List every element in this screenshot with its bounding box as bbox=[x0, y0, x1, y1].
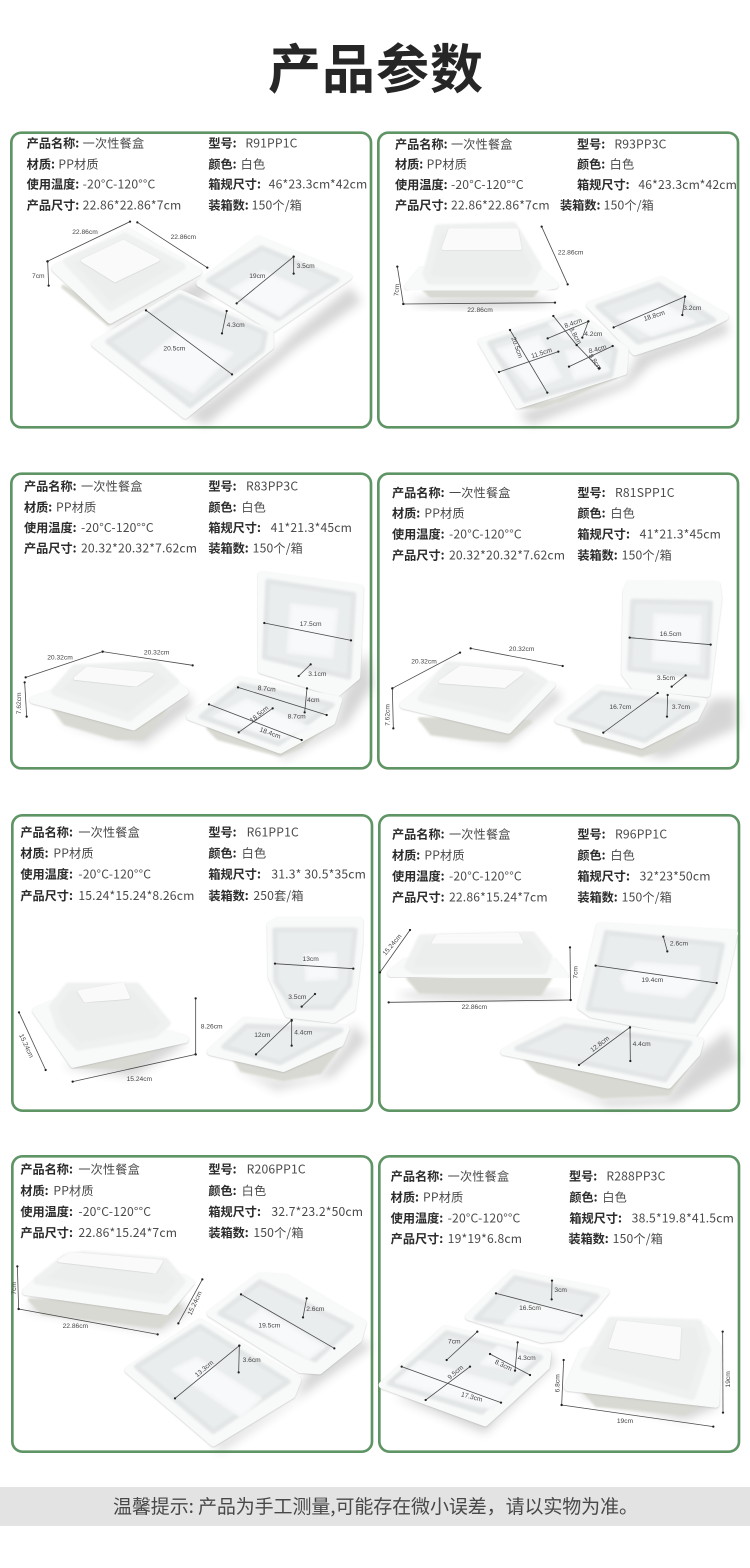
dimensions: 3.5cm bbox=[288, 994, 307, 1001]
spec text: PP材质 bbox=[424, 504, 465, 522]
dimensions: 8.4cm bbox=[588, 344, 608, 355]
dimensions: 20.32cm bbox=[411, 658, 437, 665]
spec text: -20°C-120°°C bbox=[78, 1202, 151, 1220]
spec text: 装箱数: bbox=[208, 195, 249, 213]
notice band bbox=[0, 1487, 750, 1526]
dimensions: 4.3cm bbox=[518, 1355, 536, 1362]
spec text: 白色 bbox=[610, 504, 635, 522]
dimensions: 9.5cm bbox=[447, 1364, 465, 1381]
spec text: 装箱数: bbox=[568, 1229, 609, 1247]
spec text: 一次性餐盒 bbox=[78, 1160, 140, 1178]
dimensions: 19cm bbox=[617, 1418, 634, 1425]
spec text: R81SPP1C bbox=[615, 483, 675, 501]
spec text: 产品尺寸: bbox=[27, 195, 79, 213]
spec text: 型号: bbox=[208, 1160, 237, 1178]
spec text: 箱规尺寸: bbox=[577, 524, 630, 542]
dimensions: 13.3cm bbox=[194, 1359, 215, 1379]
dimensions: 22.86cm bbox=[171, 234, 197, 241]
spec text: 一次性餐盒 bbox=[449, 483, 511, 501]
dimensions: 3.2cm bbox=[683, 305, 702, 312]
product: open box bbox=[558, 584, 737, 758]
spec text: 白色 bbox=[610, 846, 635, 864]
dimensions: 7.62cm bbox=[384, 704, 391, 726]
dimensions: 20.32cm bbox=[509, 646, 535, 653]
spec text: 使用温度: bbox=[20, 865, 73, 883]
dimensions: 19.4cm bbox=[641, 977, 664, 984]
spec text: 22.86*22.86*7cm bbox=[451, 196, 550, 214]
spec text: 产品尺寸: bbox=[24, 539, 77, 557]
product: closed box bbox=[408, 226, 555, 308]
dimensions: 3.1cm bbox=[308, 671, 327, 678]
dimensions: 8.8cm bbox=[567, 327, 583, 346]
spec text: 材质: bbox=[391, 1187, 419, 1205]
spec text: 箱规尺寸: bbox=[577, 867, 630, 885]
dimensions: 12.8cm bbox=[589, 1035, 611, 1054]
spec text: 装箱数: bbox=[208, 1223, 249, 1241]
panel: R288PP3C bbox=[379, 1156, 739, 1452]
spec text: 41*21.3*45cm bbox=[271, 518, 352, 536]
spec text: 产品名称: bbox=[392, 825, 445, 843]
dimensions: 15.24cm bbox=[187, 1290, 204, 1316]
dimensions: 18.8cm bbox=[643, 309, 666, 323]
spec text: 32*23*50cm bbox=[640, 867, 711, 885]
dimensions: 22.86cm bbox=[63, 1323, 89, 1330]
dimensions: 16.5cm bbox=[660, 631, 682, 638]
panel border bbox=[378, 133, 738, 427]
spec text: 颜色: bbox=[577, 846, 606, 864]
spec text: 150个/箱 bbox=[622, 887, 672, 905]
spec text: 白色 bbox=[241, 497, 266, 515]
spec text: PP材质 bbox=[423, 1187, 463, 1205]
spec text: 产品尺寸: bbox=[392, 887, 445, 905]
spec text: 一次性餐盒 bbox=[78, 823, 140, 841]
dimensions bbox=[17, 956, 353, 1083]
spec text: 38.5*19.8*41.5cm bbox=[632, 1208, 734, 1226]
dimensions: 8.26cm bbox=[201, 1023, 223, 1030]
product: open box bbox=[482, 280, 728, 425]
dimensions: 8.3cm bbox=[494, 1359, 513, 1373]
dimensions: 4.4cm bbox=[294, 1029, 313, 1036]
spec text: 22.86*15.24*7cm bbox=[78, 1223, 177, 1241]
spec text: 型号: bbox=[577, 483, 606, 501]
spec text: 150个/箱 bbox=[253, 1223, 304, 1241]
spec text: 白色 bbox=[610, 155, 634, 173]
spec text: -20°C-120°°C bbox=[451, 175, 524, 193]
dimensions: 11.5cm bbox=[531, 347, 553, 360]
dimensions: 7cm bbox=[448, 1338, 461, 1345]
dimensions: 3.5cm bbox=[297, 263, 315, 270]
spec text: 颜色: bbox=[208, 1181, 237, 1199]
spec text: 箱规尺寸: bbox=[208, 865, 261, 883]
spec text: 一次性餐盒 bbox=[448, 1166, 509, 1184]
spec text: 材质: bbox=[392, 504, 420, 522]
spec text: PP材质 bbox=[53, 844, 94, 862]
spec text: 一次性餐盒 bbox=[451, 134, 513, 152]
panel border bbox=[379, 1156, 739, 1452]
spec text: 250套/箱 bbox=[253, 886, 304, 904]
panel border bbox=[12, 815, 372, 1111]
dimensions: 7cm bbox=[11, 1282, 18, 1295]
dimensions: 6.8cm bbox=[554, 1374, 561, 1392]
spec text: 型号: bbox=[569, 1166, 597, 1184]
spec text: 型号: bbox=[208, 823, 237, 841]
spec text: 使用温度: bbox=[395, 175, 448, 193]
spec text: PP材质 bbox=[424, 846, 465, 864]
dimensions: 4.2cm bbox=[584, 331, 603, 338]
spec text: 产品尺寸: bbox=[392, 545, 445, 563]
product: closed box bbox=[33, 665, 193, 745]
spec text: 22.86*15.24*7cm bbox=[449, 887, 548, 905]
spec text: 使用温度: bbox=[391, 1208, 443, 1226]
spec text: 装箱数: bbox=[577, 545, 618, 563]
panel border bbox=[11, 133, 371, 427]
title: 产品参数 bbox=[268, 28, 483, 104]
spec text: 箱规尺寸: bbox=[569, 1208, 622, 1226]
spec text: 装箱数: bbox=[208, 886, 249, 904]
spec text: 材质: bbox=[20, 844, 49, 862]
dimensions: 22.86cm bbox=[462, 1004, 488, 1011]
dimensions: 18.4cm bbox=[258, 727, 282, 741]
panel border bbox=[11, 474, 371, 768]
dimensions bbox=[384, 631, 711, 733]
spec text: 产品尺寸: bbox=[395, 196, 448, 214]
dimensions: 2.6cm bbox=[670, 940, 689, 947]
spec text: 产品名称: bbox=[20, 823, 73, 841]
spec text: 颜色: bbox=[208, 154, 237, 172]
spec text: 150个/箱 bbox=[622, 545, 672, 563]
panel border bbox=[12, 1156, 372, 1452]
spec text: -20°C-120°°C bbox=[81, 518, 154, 536]
spec text: 150个/箱 bbox=[604, 196, 654, 214]
spec text: 材质: bbox=[395, 155, 423, 173]
spec text: R288PP3C bbox=[606, 1166, 666, 1184]
spec text bbox=[392, 483, 721, 563]
spec text: 22.86*22.86*7cm bbox=[83, 195, 181, 213]
spec text: 型号: bbox=[208, 134, 237, 152]
spec text bbox=[20, 1160, 363, 1241]
dimensions bbox=[393, 227, 702, 393]
spec text: PP材质 bbox=[58, 154, 99, 172]
spec text: R206PP1C bbox=[247, 1160, 306, 1178]
dimensions: 7cm bbox=[32, 273, 45, 280]
dimensions: 17.3cm bbox=[460, 1391, 483, 1404]
dimensions: 22.86cm bbox=[467, 307, 493, 314]
spec text: 使用温度: bbox=[392, 524, 445, 542]
panel border bbox=[378, 474, 738, 768]
spec text: 150个/箱 bbox=[252, 195, 302, 213]
dimensions: 22.86cm bbox=[72, 229, 98, 236]
spec text: 31.3* 30.5*35cm bbox=[271, 865, 366, 883]
dimensions: 13cm bbox=[303, 956, 319, 963]
dimensions: 19cm bbox=[249, 273, 266, 280]
dimensions bbox=[16, 621, 351, 741]
spec text: 白色 bbox=[242, 1181, 266, 1199]
spec text: PP材质 bbox=[53, 1181, 94, 1199]
dimensions: 3.7cm bbox=[672, 704, 691, 711]
spec text: 颜色: bbox=[577, 155, 605, 173]
panel: R93PP3C bbox=[378, 133, 738, 427]
product: closed box bbox=[391, 934, 565, 1000]
product: open box bbox=[128, 1276, 372, 1452]
dimensions: 15.24cm bbox=[17, 1033, 35, 1060]
spec text: 型号: bbox=[577, 134, 605, 152]
spec text bbox=[391, 1166, 734, 1247]
spec text: R83PP3C bbox=[246, 477, 298, 495]
spec text: -20°C-120°°C bbox=[449, 524, 522, 542]
spec text: 材质: bbox=[20, 1181, 49, 1199]
spec text: 白色 bbox=[241, 154, 265, 172]
spec text: 20.32*20.32*7.62cm bbox=[449, 545, 565, 563]
spec text: 颜色: bbox=[208, 497, 237, 515]
product: closed box bbox=[403, 665, 562, 745]
spec text: -20°C-120°°C bbox=[78, 865, 151, 883]
spec text bbox=[395, 134, 737, 214]
spec text: 19*19*6.8cm bbox=[448, 1229, 522, 1247]
spec text: 产品名称: bbox=[392, 483, 445, 501]
product: open box bbox=[211, 921, 367, 1090]
dimensions: 22.86cm bbox=[558, 249, 584, 256]
panel: R83PP3C bbox=[11, 474, 373, 768]
spec text: 材质: bbox=[392, 846, 420, 864]
spec text: 一次性餐盒 bbox=[449, 825, 511, 843]
spec text: 20.32*20.32*7.62cm bbox=[81, 539, 197, 557]
dimensions bbox=[380, 930, 717, 1065]
dimensions: 4.3cm bbox=[227, 322, 245, 329]
spec text: 产品名称: bbox=[27, 134, 79, 152]
spec text: 一次性餐盒 bbox=[83, 134, 144, 152]
dimensions: 4.4cm bbox=[633, 1041, 651, 1048]
dimensions: 4cm bbox=[307, 697, 320, 704]
panel: R91PP1C bbox=[11, 133, 371, 427]
panel: R206PP1C bbox=[11, 1156, 372, 1452]
spec text: PP材质 bbox=[427, 155, 467, 173]
spec text: 150个/箱 bbox=[253, 539, 303, 557]
spec text: 型号: bbox=[208, 477, 237, 495]
dimensions: 20.5cm bbox=[163, 345, 186, 352]
spec text: 使用温度: bbox=[27, 175, 79, 193]
spec text: R96PP1C bbox=[615, 825, 667, 843]
dimensions: 20.32cm bbox=[144, 649, 170, 656]
spec text: 颜色: bbox=[569, 1187, 598, 1205]
spec text: -20°C-120°°C bbox=[448, 1208, 521, 1226]
dimensions: 15.24cm bbox=[127, 1076, 153, 1083]
spec text: 15.24*15.24*8.26cm bbox=[78, 886, 195, 904]
spec text: 白色 bbox=[242, 844, 266, 862]
spec text: 一次性餐盒 bbox=[81, 477, 143, 495]
spec text: 46*23.3cm*42cm bbox=[269, 175, 367, 193]
spec text: 150个/箱 bbox=[613, 1229, 663, 1247]
dimensions: 8.8cm bbox=[587, 353, 603, 372]
dimensions: 3cm bbox=[554, 1287, 567, 1294]
spec text: 白色 bbox=[602, 1187, 627, 1205]
spec text: 产品名称: bbox=[20, 1160, 73, 1178]
spec text: 装箱数: bbox=[208, 539, 249, 557]
spec text: 箱规尺寸: bbox=[208, 1202, 261, 1220]
panel border bbox=[379, 815, 739, 1111]
dimensions: 8.4cm bbox=[564, 317, 584, 330]
dimensions: 7cm bbox=[393, 283, 401, 297]
product: open box bbox=[504, 926, 738, 1107]
spec text: 型号: bbox=[577, 825, 606, 843]
spec text: 使用温度: bbox=[24, 518, 77, 536]
dimensions: 15.24cm bbox=[382, 933, 404, 957]
dimensions: 2.6cm bbox=[306, 1306, 325, 1313]
dimensions: 8.7cm bbox=[288, 713, 306, 720]
spec text: PP材质 bbox=[56, 497, 96, 515]
panel: R61PP1C bbox=[12, 815, 372, 1111]
spec text: R91PP1C bbox=[245, 134, 298, 152]
dimensions: 17.5cm bbox=[300, 621, 322, 628]
spec text: 颜色: bbox=[577, 504, 606, 522]
dimensions: 20.5cm bbox=[509, 336, 524, 360]
spec text: 产品尺寸: bbox=[20, 1223, 73, 1241]
spec text: 32.7*23.2*50cm bbox=[271, 1202, 363, 1220]
dimensions: 7cm bbox=[572, 966, 579, 979]
dimensions: 16.5cm bbox=[519, 1305, 541, 1312]
product: open box bbox=[190, 575, 373, 760]
dimensions: 19cm bbox=[725, 1371, 732, 1387]
spec text: 产品尺寸: bbox=[20, 886, 73, 904]
spec text: 产品尺寸: bbox=[391, 1229, 443, 1247]
spec text: -20°C-120°°C bbox=[449, 867, 522, 885]
spec text: 箱规尺寸: bbox=[577, 175, 630, 193]
spec text: 材质: bbox=[27, 154, 55, 172]
product: open box bbox=[382, 1273, 606, 1433]
spec text: 材质: bbox=[24, 497, 52, 515]
spec text: 箱规尺寸: bbox=[208, 175, 261, 193]
product: closed box bbox=[55, 232, 213, 340]
spec text: 使用温度: bbox=[392, 867, 445, 885]
product: closed box bbox=[568, 1321, 718, 1420]
dimensions: 3.6cm bbox=[243, 1357, 261, 1364]
spec text bbox=[27, 134, 367, 213]
dimensions: 18.5cm bbox=[249, 705, 270, 724]
product: closed box bbox=[36, 984, 187, 1077]
dimensions: 20.32cm bbox=[47, 654, 73, 661]
dimensions: 19.5cm bbox=[258, 1322, 281, 1329]
spec text: 41*21.3*45cm bbox=[640, 524, 721, 542]
spec text: 装箱数: bbox=[577, 887, 618, 905]
spec text: 装箱数: bbox=[560, 196, 600, 214]
spec text bbox=[20, 823, 366, 904]
spec text bbox=[392, 825, 711, 905]
panel: R96PP1C bbox=[379, 815, 739, 1111]
spec text: 箱规尺寸: bbox=[208, 518, 261, 536]
spec text: R61PP1C bbox=[247, 823, 299, 841]
dimensions: 3.5cm bbox=[657, 675, 676, 682]
spec text: 使用温度: bbox=[20, 1202, 73, 1220]
spec text bbox=[24, 477, 352, 557]
panel: R81SPP1C bbox=[378, 474, 738, 768]
spec text: R93PP3C bbox=[614, 134, 667, 152]
spec text: 产品名称: bbox=[391, 1166, 443, 1184]
product: closed box bbox=[26, 1254, 191, 1332]
spec text: 产品名称: bbox=[395, 134, 448, 152]
dimensions bbox=[32, 222, 315, 374]
dimensions: 16.7cm bbox=[609, 704, 632, 711]
dimensions: 7.62cm bbox=[16, 692, 23, 714]
spec text: 46*23.3cm*42cm bbox=[638, 175, 737, 193]
spec text: -20°C-120°°C bbox=[83, 175, 156, 193]
spec text: 产品名称: bbox=[24, 477, 77, 495]
dimensions: 8.7cm bbox=[257, 685, 276, 694]
spec text: 颜色: bbox=[208, 844, 237, 862]
dimensions: 12cm bbox=[254, 1032, 271, 1039]
product: open box bbox=[95, 239, 362, 425]
dimensions bbox=[402, 1281, 732, 1427]
notice band: 温馨提示: 产品为手工测量,可能存在微小误差，请以实物为准。 bbox=[113, 1492, 638, 1519]
dimensions bbox=[11, 1266, 334, 1398]
